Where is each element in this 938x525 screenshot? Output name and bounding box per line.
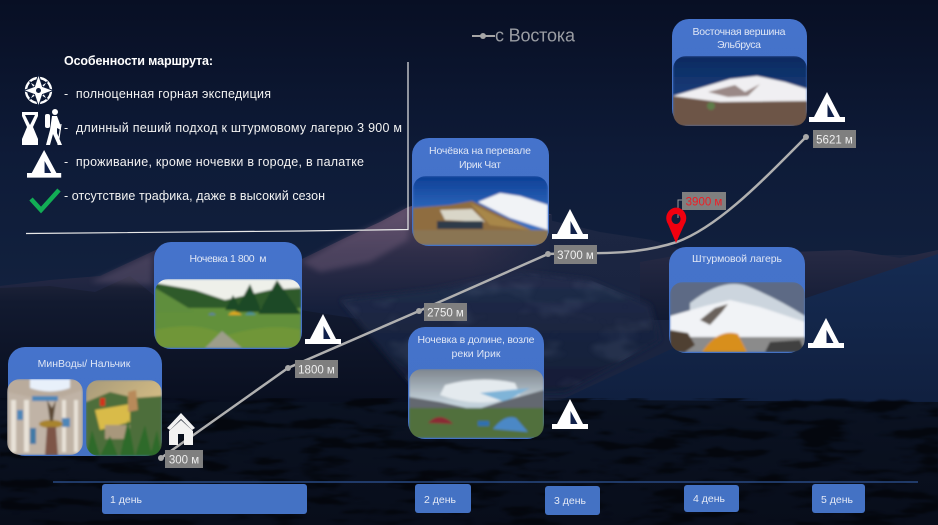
altitude label 2750 m: 2750 м: [427, 308, 464, 320]
icon: tent 3700 m: [552, 209, 588, 239]
elevation route line: [158, 134, 809, 461]
legend text: long approach walk: - длинный пеший подход к штурмовому лагерю 3 900 м: [64, 121, 402, 135]
altitude label 3700 m: 3700 м: [557, 250, 594, 262]
icon: house: [167, 413, 195, 445]
day 2: 2 день: [424, 494, 457, 506]
day 5: [812, 484, 865, 513]
timeline axis: [53, 481, 918, 483]
altitude label 5621 m: 5621 м: [816, 134, 853, 146]
card: Mineralnye Vody / Nalchik: [7, 347, 162, 456]
card: valley near Irik river: реки Ирик: [452, 348, 501, 360]
panel: route features legend: [22, 54, 408, 234]
altitude label 3900 m in red: 3900 м: [686, 196, 722, 208]
legend text: no crowds: - отсутствие трафика, даже в высокий сезон: [64, 189, 325, 203]
card: valley near Irik river: [408, 327, 544, 439]
day 2: [415, 484, 471, 513]
legend text: full mountain expedition: - полноценная горная экспедиция: [64, 87, 271, 101]
day 4: 4 день: [693, 493, 726, 505]
photo: group on pass with Elbrus: [413, 176, 548, 245]
title: route direction: с Востока: [495, 26, 576, 46]
day 1: [102, 484, 307, 514]
icon: red location pin: [666, 208, 686, 243]
altitude label 2750 m: [424, 303, 467, 321]
photo: green valley camp: [155, 279, 301, 348]
legend heading: Особенности маршрута:: [64, 54, 213, 68]
icon: tent 1800 m: [305, 314, 341, 344]
icon: hourglass: [22, 112, 38, 145]
icon: tent legend: [27, 150, 61, 178]
day 3: 3 день: [554, 495, 587, 507]
day 4: [684, 485, 739, 512]
altitude label 300 m: [165, 450, 203, 468]
day 3: [545, 486, 600, 515]
icon: green check mark: [31, 190, 59, 210]
icon: tent valley: [552, 399, 588, 429]
altitude label 1800 m: 1800 м: [298, 364, 335, 376]
card title: Восточная вершина: [692, 26, 786, 38]
day 5: 5 день: [821, 494, 854, 506]
card title: Штурмовой лагерь: [692, 253, 783, 265]
card: Elbrus east summit: [672, 19, 807, 126]
card: assault camp: [669, 247, 805, 353]
legend text: tent accommodation: - проживание, кроме ночевки в городе, в палатке: [64, 155, 364, 169]
altitude label 5621 m: [813, 130, 856, 148]
photo: snowy summit: [673, 56, 807, 126]
altitude label 3900 m in red: [678, 192, 726, 218]
altitude label 300 m: 300 м: [169, 454, 199, 466]
altitude label 3700 m: [554, 245, 597, 264]
photo: camp under snowy peak: [670, 282, 805, 352]
card title: МинВоды/ Нальчик: [38, 358, 131, 370]
day 1: 1 день: [110, 494, 143, 506]
photo: Nalchik fortress landscape: [86, 380, 162, 456]
card: Irik Chat pass: Ирик Чат: [459, 159, 501, 171]
card: Irik Chat pass: [412, 138, 549, 246]
card: Elbrus east summit: Эльбруса: [717, 39, 761, 51]
card title: Ночевка 1 800 м: [190, 253, 266, 265]
legend frame: [26, 62, 408, 234]
photo: station with fountain: [7, 379, 83, 455]
altitude label 1800 m: [295, 360, 338, 378]
card title: Ночёвка на перевале: [429, 145, 531, 157]
icon: tent summit: [809, 92, 845, 122]
photo: tents in valley: [409, 369, 544, 438]
icon: compass: [24, 74, 54, 106]
card: overnight 1800 m: [154, 242, 302, 349]
icon: hiker: [45, 109, 62, 145]
card title: Ночевка в долине, возле: [418, 334, 535, 346]
icon: tent assault camp: [808, 318, 844, 348]
